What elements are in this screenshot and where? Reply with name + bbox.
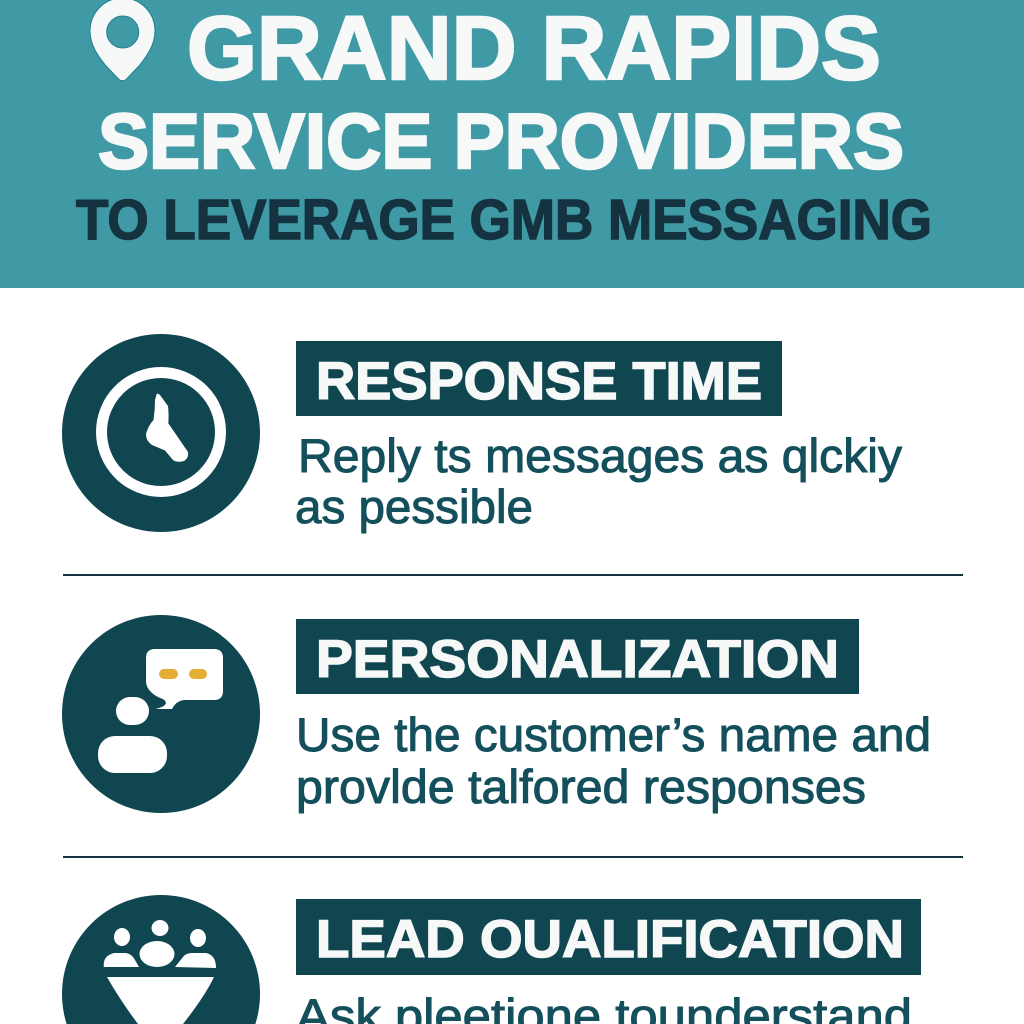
header banner [0,0,1024,288]
panel: personalization [62,615,931,813]
text: personalization description [296,708,931,813]
title: line 1: GRAND RAPIDS [187,0,881,99]
icon: location pin [90,0,155,81]
icon: people funnel [62,895,260,1024]
text: response time description [295,429,903,533]
title: line 3: TO LEVERAGE GMB MESSAGING [76,188,932,252]
title: line 2: SERVICE PROVIDERS [98,97,904,185]
text: response time description: Reply ts messages as qlckiy [298,429,903,482]
heading: personalization: PERSONALIZATION [316,630,839,689]
text: personalization description: provlde talfored responses [296,760,866,813]
panel: lead qualification [62,895,921,1024]
icon: clock [62,334,260,532]
text: response time description: as pessible [295,480,533,533]
heading: lead qualification: LEAD OUALIFICATION [316,910,904,969]
text: personalization description: Use the customer’s name and [296,708,931,761]
heading: response time: RESPONSE TIME [316,352,762,411]
panel: response time [62,334,903,533]
icon: chat person [62,615,260,813]
